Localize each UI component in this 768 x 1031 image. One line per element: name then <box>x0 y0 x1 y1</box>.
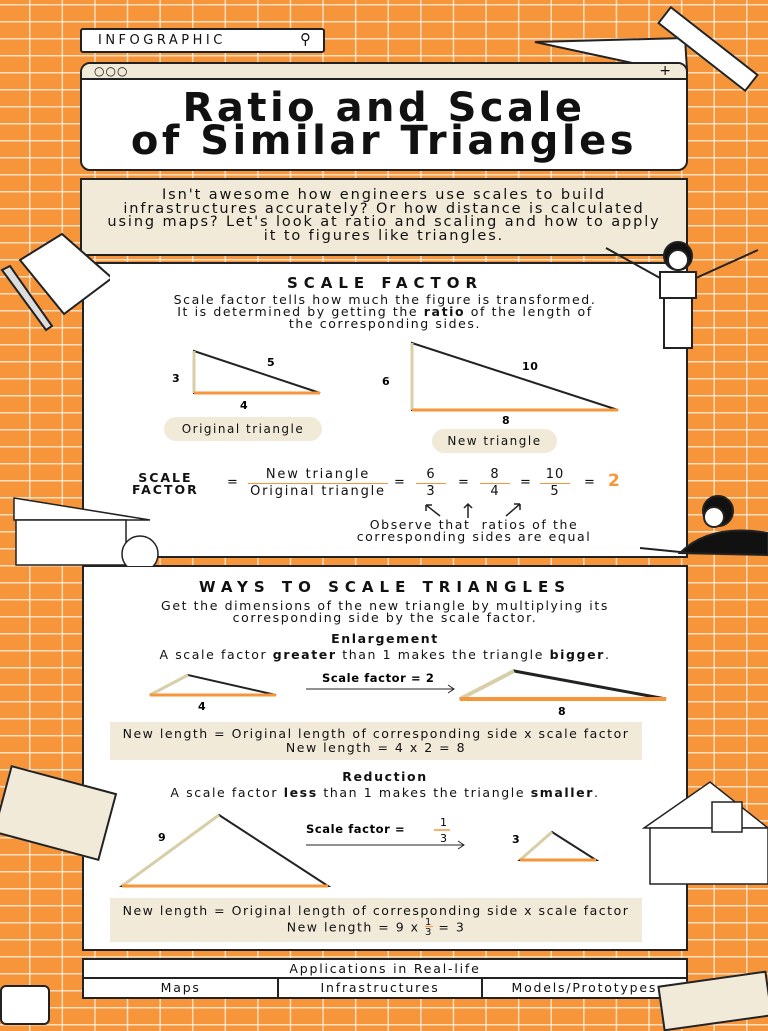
title panel: ○○○ <box>94 64 128 78</box>
triangles diagram: 5 <box>267 356 275 369</box>
reduction formula box: 1 <box>425 917 433 928</box>
triangles diagram <box>172 342 618 427</box>
scale factor formula: 2 <box>608 471 621 491</box>
triangles diagram: 8 <box>502 414 510 427</box>
panel: ways to scale <box>82 565 688 951</box>
observation note: corresponding sides are equal <box>357 529 591 544</box>
applications table: Infrastructures <box>321 980 440 995</box>
illustration: house right <box>642 781 768 885</box>
applications table <box>82 958 688 999</box>
intro text: it to figures like triangles. <box>264 228 504 244</box>
scale factor formula: = <box>520 475 532 490</box>
triangles diagram: 6 <box>382 375 390 388</box>
scale factor formula: = <box>584 475 596 490</box>
reduction diagram: 3 <box>512 833 520 846</box>
title: Ratio and Scale <box>183 85 585 131</box>
title <box>131 85 637 164</box>
scale factor formula: 6 3 <box>426 467 436 499</box>
description: Scale factor tells how much the figure is transformed. <box>174 292 596 307</box>
reduction formula box: New length = 9 x = 3 <box>287 920 465 934</box>
icon: set square <box>534 37 688 71</box>
heading: WAYS TO SCALE TRIANGLES <box>199 578 571 596</box>
reduction: Reduction <box>342 769 428 784</box>
heading: SCALE FACTOR <box>287 274 483 292</box>
illustration: map right <box>657 971 768 1031</box>
reduction diagram <box>119 814 600 888</box>
intro text: infrastructures accurately? Or how distance is calculated <box>123 200 645 216</box>
triangles diagram: 3 <box>172 372 180 385</box>
search bar: infographic: ⚲ <box>300 30 311 48</box>
reduction formula box: 3 <box>425 927 433 938</box>
intro text: using maps? Let's look at ratio and scaling and how to apply <box>107 214 661 230</box>
description: corresponding side by the scale factor. <box>233 610 537 625</box>
reduction diagram: 1 <box>440 816 448 829</box>
scale factor formula: = <box>227 475 239 490</box>
description: the corresponding sides. <box>289 316 481 331</box>
enlargement diagram: 4 <box>198 700 206 713</box>
scale factor formula: 8 4 <box>490 467 500 499</box>
reduction formula box: New length = Original length of corresponding side x scale factor <box>123 903 629 918</box>
icon: notepad and pencil <box>0 232 110 332</box>
reduction formula box <box>110 898 642 942</box>
arrows <box>425 503 521 518</box>
description <box>174 292 596 331</box>
illustration: boy <box>640 495 768 556</box>
applications table: Models/Prototypes <box>512 980 657 995</box>
enlargement diagram: 8 <box>558 705 566 718</box>
observation note: Observe that ratios of the <box>370 517 578 532</box>
illustration: map left <box>0 765 117 861</box>
scale factor formula: New triangle Original triangle <box>250 467 386 499</box>
icon: ruler <box>657 6 759 92</box>
enlargement diagram: Scale factor = 2 <box>322 671 434 685</box>
title: of Similar Triangles <box>131 118 637 164</box>
scale factor formula: = <box>394 475 406 490</box>
triangles diagram: 4 <box>240 399 248 412</box>
enlargement diagram <box>149 669 666 718</box>
enlargement formula box: New length = 4 x 2 = 8 <box>286 740 466 755</box>
illustration: girl <box>606 241 758 349</box>
triangles diagram: 10 <box>522 360 539 373</box>
illustration: house left <box>13 497 159 566</box>
enlargement: A scale factor greater than 1 makes the triangle bigger. <box>159 647 611 662</box>
title panel: + <box>659 63 672 79</box>
title panel <box>80 62 688 171</box>
enlargement <box>159 631 611 662</box>
scale factor formula: = <box>458 475 470 490</box>
enlargement formula box <box>110 722 642 760</box>
label: new triangle: New triangle <box>447 434 542 448</box>
scale factor formula: 10 5 <box>546 467 564 499</box>
reduction <box>170 769 600 800</box>
description: Get the dimensions of the new triangle by multiplying its <box>161 598 609 613</box>
intro text <box>80 178 688 256</box>
reduction diagram: Scale factor = <box>306 822 405 836</box>
search bar: infographic: INFOGRAPHIC <box>98 33 226 48</box>
search bar: infographic <box>80 28 325 53</box>
description <box>161 598 609 625</box>
description: It is determined by getting the ratio of the length of <box>177 304 593 319</box>
scale factor formula: SCALE <box>138 470 193 485</box>
panel: scale factor <box>82 262 688 558</box>
label: new triangle <box>432 429 557 453</box>
reduction diagram: 9 <box>158 831 166 844</box>
enlargement: Enlargement <box>331 631 439 646</box>
enlargement formula box: New length = Original length of corresponding side x scale factor <box>123 726 629 741</box>
reduction: A scale factor less than 1 makes the triangle smaller. <box>170 785 600 800</box>
scale factor formula <box>132 467 621 544</box>
applications table: Maps <box>161 980 201 995</box>
label: original triangle <box>164 417 322 441</box>
label: original triangle: Original triangle <box>182 422 304 436</box>
observation note <box>357 517 591 544</box>
applications table: Applications in Real-life <box>289 961 481 976</box>
scale factor formula: FACTOR <box>132 482 199 497</box>
intro text: Isn't awesome how engineers use scales to build <box>162 187 606 203</box>
illustration: pencil cup <box>0 985 50 1025</box>
reduction diagram: 3 <box>440 832 448 845</box>
